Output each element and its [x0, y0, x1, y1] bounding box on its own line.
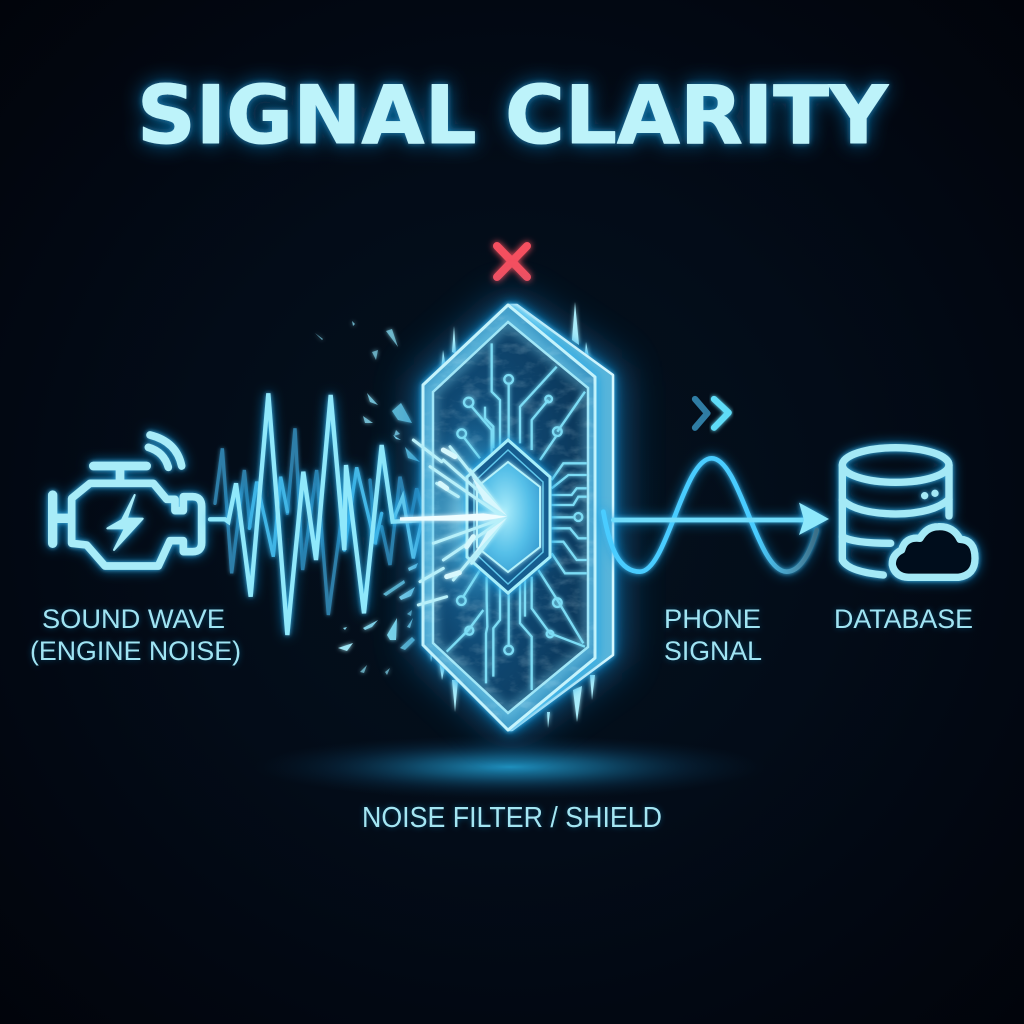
label: phone signal: SIGNAL — [664, 636, 762, 666]
circuit traces — [447, 343, 587, 690]
impact burst streaks — [400, 440, 507, 605]
panel: noise filter shield — [400, 296, 622, 740]
dim background wave — [215, 428, 427, 615]
beam — [400, 513, 507, 521]
chart: noisy sound wave — [210, 393, 430, 635]
floor glow under shield — [255, 735, 765, 799]
frosted texture — [424, 312, 595, 720]
arrow shaft — [613, 513, 803, 527]
label: phone signal: PHONE — [664, 604, 761, 634]
label: noise filter shield: NOISE FILTER / SHIELD — [362, 802, 662, 834]
shield front face — [423, 305, 595, 730]
icon: red x rejected noise — [497, 246, 527, 277]
arrow head — [799, 503, 829, 535]
bright main wave — [210, 393, 430, 635]
icon: database with cloud — [842, 448, 975, 577]
icon: forward chevrons — [695, 399, 729, 428]
label: phone signal — [664, 604, 762, 666]
icicles — [429, 302, 595, 728]
label: sound wave engine noise — [30, 604, 241, 666]
label: sound wave engine noise: SOUND WAVE — [42, 604, 225, 634]
label: sound wave engine noise: (ENGINE NOISE) — [30, 636, 241, 666]
shield inner plate — [433, 322, 588, 713]
label: database: DATABASE — [834, 604, 973, 634]
title: SIGNAL CLARITY — [137, 69, 889, 162]
shield side face — [508, 305, 613, 730]
chart: clean phone signal sine wave with arrow — [603, 458, 829, 572]
sine wave — [603, 458, 817, 572]
icon: engine with sound arcs — [53, 435, 202, 566]
hexagon core — [467, 440, 550, 593]
shield halo — [414, 296, 622, 740]
noise shards breaking off shield — [315, 321, 420, 675]
mid wave — [249, 467, 423, 558]
burst glow on shield — [405, 423, 535, 613]
